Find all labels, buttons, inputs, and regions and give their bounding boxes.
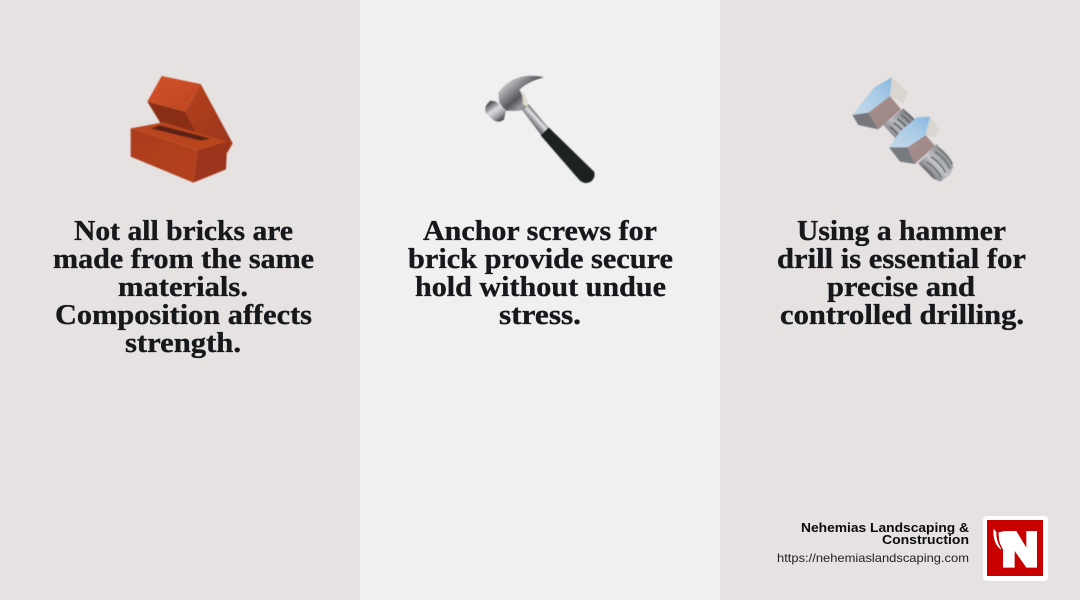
heading: anchor screws fact: Anchor screws for — [423, 215, 657, 247]
company name and URL: https://nehemiaslandscaping.com — [777, 551, 969, 565]
company name and URL: Construction — [882, 532, 969, 547]
heading: bricks fact — [53, 215, 314, 359]
logo — [983, 516, 1048, 581]
panel: bricks background — [0, 0, 360, 600]
heading: hammer drill fact: precise and — [827, 271, 975, 303]
panel: hammer drill background — [720, 0, 1080, 600]
company name and URL: Nehemias Landscaping & — [801, 520, 969, 535]
heading: hammer drill fact: drill is essential for — [777, 243, 1026, 275]
icon: bolt and nut — [852, 77, 953, 182]
heading: anchor screws fact: stress. — [499, 299, 581, 331]
icon: hammer — [485, 76, 595, 183]
panel: anchor screws background — [360, 0, 720, 600]
heading: bricks fact: materials. — [118, 271, 248, 303]
heading: anchor screws fact: brick provide secure — [408, 243, 673, 275]
company name and URL — [777, 520, 969, 565]
heading: anchor screws fact: hold without undue — [415, 271, 666, 303]
heading: hammer drill fact — [777, 215, 1026, 331]
heading: bricks fact: Not all bricks are — [74, 215, 293, 247]
heading: bricks fact: strength. — [125, 327, 241, 359]
heading: hammer drill fact: Using a hammer — [797, 215, 1006, 247]
heading: bricks fact: Composition affects — [55, 299, 312, 331]
heading: hammer drill fact: controlled drilling. — [780, 299, 1024, 331]
heading: bricks fact: made from the same — [53, 243, 314, 275]
heading: anchor screws fact — [408, 215, 673, 331]
icon: bricks — [131, 76, 233, 183]
